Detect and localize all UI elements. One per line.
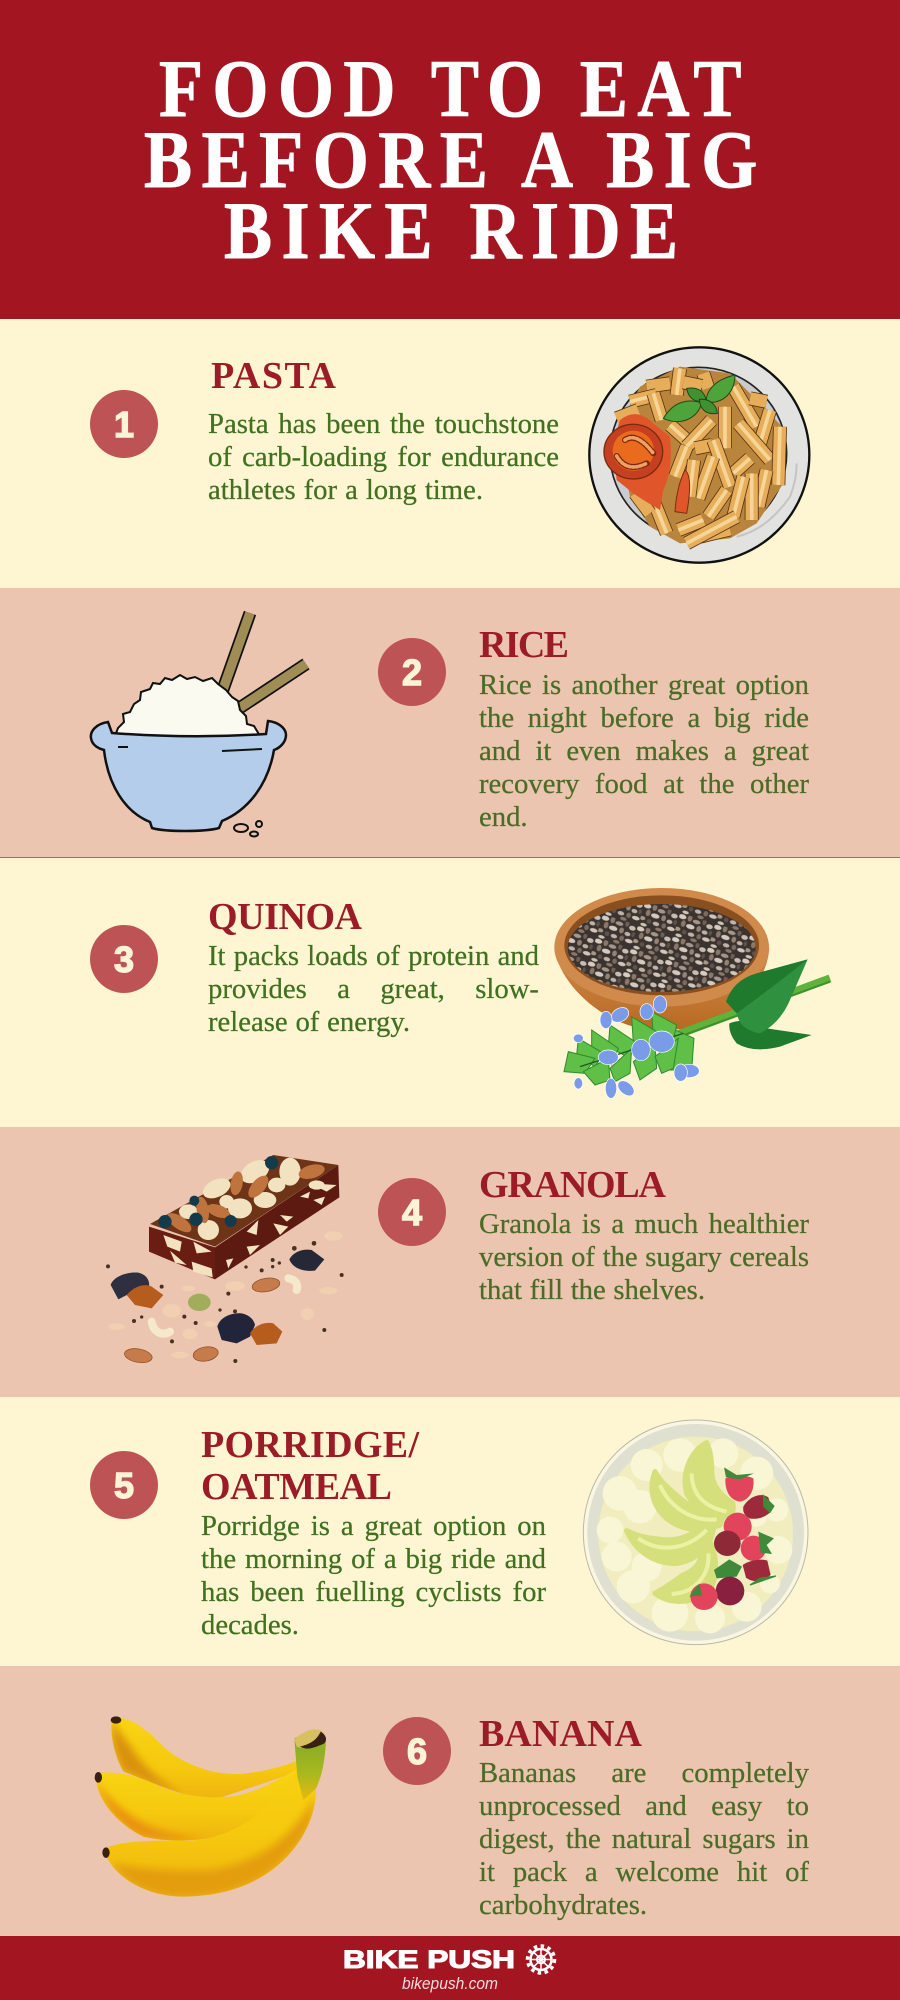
icon: plate of penne pasta	[589, 347, 809, 563]
body text: quinoa: provides a great, slow-	[208, 973, 539, 1005]
body text: banana: unprocessed and easy to	[479, 1790, 809, 1822]
body text: porridge: decades.	[201, 1609, 299, 1641]
body text: pasta: of carb-loading for endurance	[208, 441, 559, 473]
number badge 2: 2	[402, 652, 422, 693]
title	[144, 43, 757, 276]
icon: gear	[528, 1946, 554, 1973]
body text: quinoa: release of energy.	[208, 1006, 410, 1038]
body text: banana: it pack a welcome hit of	[479, 1856, 809, 1888]
body text: rice: recovery food at the other	[479, 768, 809, 800]
panel: granola	[0, 1127, 900, 1397]
panel: quinoa	[0, 858, 900, 1127]
body text: porridge: Porridge is a great option on	[201, 1510, 546, 1542]
body text: rice: the night before a big ride	[479, 702, 809, 734]
body text: rice	[479, 669, 809, 833]
panel: banana	[0, 1666, 900, 1936]
icon: granola bar with scattered nuts	[106, 1155, 344, 1365]
body text: banana	[479, 1757, 810, 1921]
panel: pasta	[0, 319, 900, 588]
heading: porridge / oatmeal: PORRIDGE/	[201, 1424, 419, 1466]
header banner with title	[0, 0, 900, 319]
icon: porridge bowl with avocado and berries	[583, 1420, 808, 1645]
body text: quinoa: It packs loads of protein and	[208, 940, 539, 972]
number badge 6	[383, 1717, 451, 1785]
title: BEFORE A BIG	[144, 114, 757, 205]
body text: granola	[478, 1208, 809, 1306]
body text: banana: Bananas are completely	[479, 1757, 809, 1789]
footer brand name: BIKE PUSH	[343, 1946, 515, 1974]
title: FOOD TO EAT	[159, 43, 742, 134]
body text: pasta: Pasta has been the touchstone	[208, 408, 559, 440]
number badge 2	[378, 638, 446, 706]
number badge 4	[378, 1178, 446, 1246]
body text: pasta	[208, 408, 559, 506]
body text: granola: that fill the shelves.	[479, 1274, 705, 1306]
body text: pasta: athletes for a long time.	[208, 474, 483, 506]
body text: porridge	[201, 1510, 546, 1641]
body text: granola: version of the sugary cereals	[479, 1241, 809, 1273]
icon: banana bunch	[95, 1716, 326, 1897]
icon: rice bowl with chopsticks	[91, 613, 306, 836]
heading: rice: RICE	[479, 624, 569, 666]
heading: pasta: PASTA	[211, 355, 337, 397]
number badge 3: 3	[114, 939, 134, 980]
heading: porridge / oatmeal	[201, 1424, 419, 1508]
number badge 4: 4	[402, 1192, 422, 1233]
number badge 1	[90, 390, 158, 458]
heading: granola: GRANOLA	[479, 1164, 667, 1206]
body text: rice: Rice is another great option	[479, 669, 809, 701]
footer	[0, 1936, 900, 2000]
heading: porridge / oatmeal: OATMEAL	[201, 1466, 392, 1508]
heading: quinoa: QUINOA	[208, 896, 363, 938]
icon: quinoa bowl with sprig	[554, 888, 830, 1099]
body text: porridge: the morning of a big ride and	[201, 1543, 546, 1575]
number badge 5: 5	[114, 1465, 134, 1506]
footer url: bikepush.com	[402, 1974, 498, 1993]
body text: quinoa	[208, 940, 539, 1038]
body text: rice: and it even makes a great	[479, 735, 809, 767]
body text: banana: carbohydrates.	[479, 1889, 647, 1921]
title: BIKE RIDE	[224, 185, 678, 276]
body text: rice: end.	[479, 801, 528, 833]
panel: rice	[0, 588, 900, 858]
number badge 1: 1	[114, 404, 134, 445]
heading: banana: BANANA	[479, 1713, 643, 1755]
body text: granola: Granola is a much healthier	[479, 1208, 809, 1240]
number badge 5	[90, 1451, 158, 1519]
body text: banana: digest, the natural sugars in	[479, 1823, 809, 1855]
panel: porridge	[0, 1397, 900, 1666]
number badge 6: 6	[407, 1731, 427, 1772]
number badge 3	[90, 925, 158, 993]
body text: porridge: has been fuelling cyclists for	[201, 1576, 546, 1608]
